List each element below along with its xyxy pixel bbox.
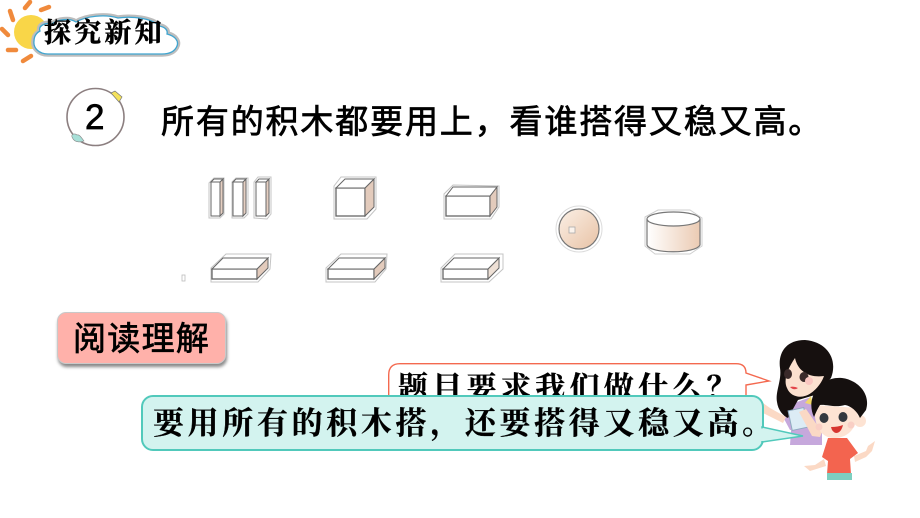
tall block 3 — [254, 177, 271, 219]
number badge — [66, 88, 125, 146]
wide block — [444, 185, 499, 219]
flat block 1 — [211, 254, 271, 282]
tall block 1 — [209, 178, 224, 218]
icon: sun — [0, 0, 52, 64]
reading comprehension label — [57, 312, 226, 364]
question text: 题目要求我们做什么？ — [398, 372, 741, 405]
sphere — [556, 206, 602, 252]
flat block 3 — [441, 254, 503, 282]
section title badge: cloud — [31, 13, 180, 57]
cylinder — [645, 210, 702, 254]
speech bubble: answer — [141, 395, 777, 451]
answer text: 要用所有的积木搭，还要搭得又稳又高。 — [153, 406, 777, 441]
cube — [334, 177, 376, 219]
tall block 2 — [232, 178, 248, 218]
flat block 2 — [326, 254, 387, 282]
speech bubble: question — [388, 363, 772, 405]
heading: 所有的积木都要用上，看谁搭得又稳又高。 — [161, 103, 823, 140]
label text: 阅读理解 — [73, 320, 210, 357]
number: 2 — [85, 98, 104, 137]
title text: 探究新知 — [44, 18, 165, 48]
